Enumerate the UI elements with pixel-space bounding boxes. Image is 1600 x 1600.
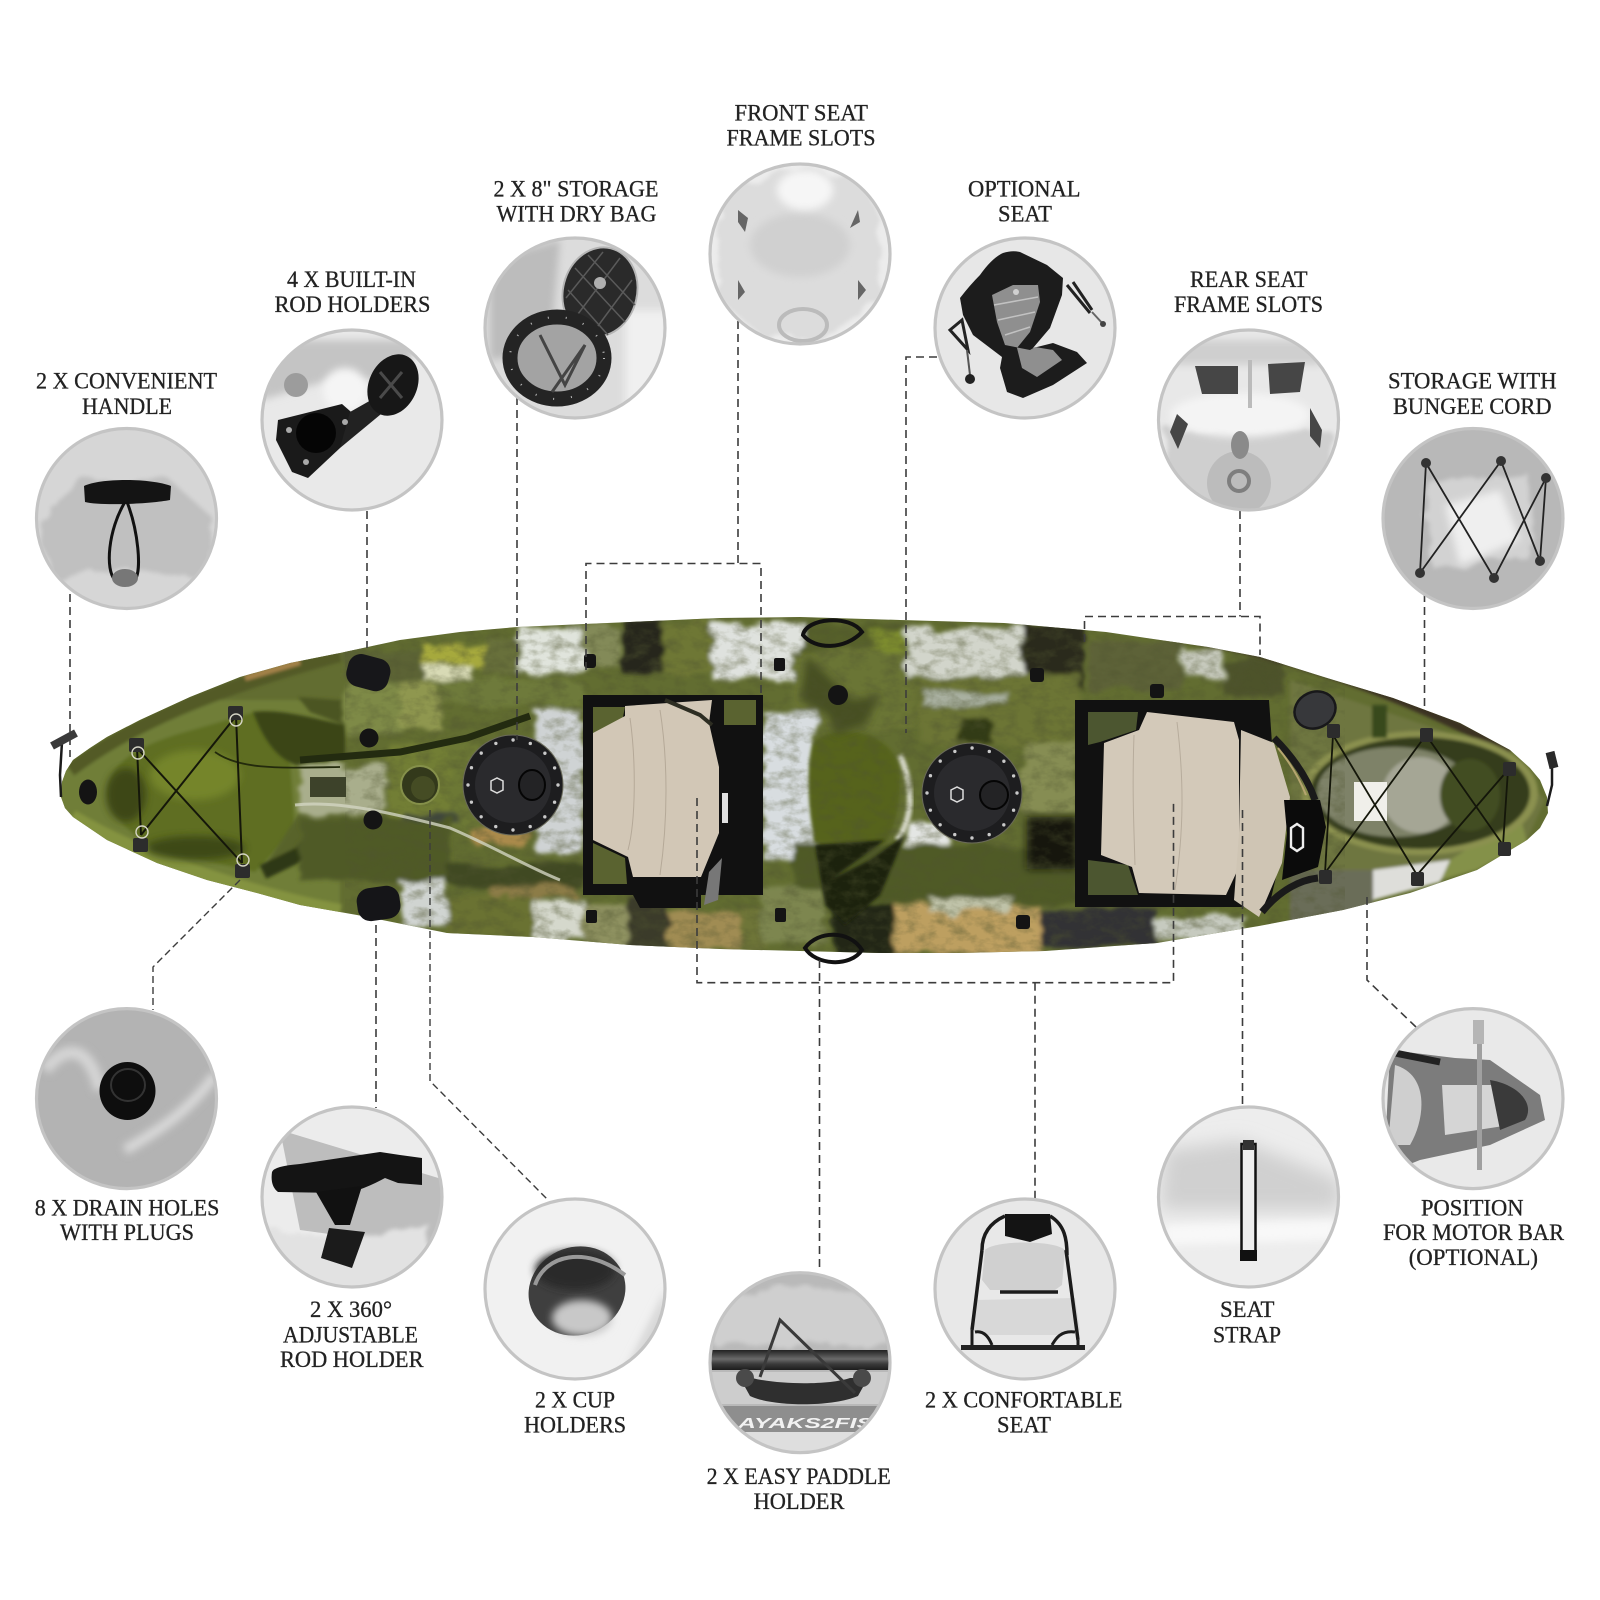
bow handles [52,733,1554,806]
leader: handle [69,594,71,757]
label: SEAT [997,1412,1051,1438]
icon: cup holder [486,1200,664,1378]
label: ADJUSTABLE [283,1322,418,1348]
label: OPTIONAL [968,176,1080,202]
callout: rear seat frame slots [1155,267,1345,515]
label: SEAT [1220,1297,1274,1323]
label [274,267,430,318]
callout: built-in rod holders [255,267,450,515]
front bungee cord [129,706,250,878]
label [36,369,217,420]
rear bungee cord [1319,724,1516,886]
hull body [61,617,1548,953]
label: 2 X 360° [310,1297,392,1323]
label [1388,369,1557,420]
leader: paddle holder [818,960,820,1272]
label: 2 X 8" STORAGE [494,176,658,202]
rod holders [343,651,1342,923]
icon: framed seat [936,1200,1114,1378]
leader: adjustable rod holder [375,925,377,1108]
label: 2 X CONFORTABLE [925,1388,1122,1414]
label: POSITION [1421,1196,1524,1222]
leader: bungee storage [1424,594,1426,707]
front seat frame [583,695,763,908]
label: FRONT SEAT [734,101,868,127]
label: HANDLE [82,394,172,420]
icon: front seat slots [712,166,888,342]
label: ROD HOLDER [280,1347,424,1373]
dark stain by rear seat [1027,817,1077,869]
label [707,1464,891,1515]
bow paint and footwell [61,652,342,912]
label: ROD HOLDERS [274,292,430,318]
callout: storage with bungee cord [1380,369,1570,615]
icon: paddle holder [712,1274,888,1451]
label: 4 X BUILT-IN [287,267,416,293]
leader: storage [516,397,518,740]
label [968,176,1080,227]
label: WITH PLUGS [60,1220,194,1246]
label [524,1388,626,1438]
icon: paddle holder: AYAKS2FIS [736,1415,873,1432]
icon: strap [1160,1108,1337,1286]
label [35,1196,219,1246]
center well [808,731,900,843]
drain plugs and fittings [79,654,1164,929]
icon: bungee storage [1384,430,1562,607]
center carry handles [803,620,862,962]
label: BUNGEE CORD [1393,394,1552,420]
channel lines [215,716,560,880]
leader: motor bar [1367,897,1416,1027]
leader: comfortable seat [697,798,1174,1199]
stern paint and recess [1186,644,1544,920]
callout: 360 adjustable rod holder [255,1100,450,1373]
label [726,101,876,152]
label: 2 X CONVENIENT [36,369,217,395]
leader: drain holes [153,880,240,1010]
callout: comfortable seat [925,1195,1122,1438]
seat logo [1291,824,1303,851]
rear hatch [922,743,1022,843]
rear seat frame [1075,700,1326,917]
icon: hatch with dry bag [486,240,664,416]
label: STRAP [1213,1322,1281,1348]
dashed leader lines [70,321,1424,1272]
label: HOLDERS [524,1412,626,1438]
painted deck patches [300,618,1285,955]
callout: motor bar [1380,1005,1570,1271]
front hatch [463,735,563,835]
callout: drain holes [30,1005,220,1246]
callout: seat strap [1155,1100,1345,1348]
bow recesses [253,697,350,872]
label: FRAME SLOTS [726,126,876,152]
label: 8 X DRAIN HOLES [35,1196,219,1222]
label: 2 X EASY PADDLE [707,1464,891,1490]
cup holder [401,766,439,804]
label: SEAT [998,201,1052,227]
callout: paddle holder [705,1270,895,1515]
label [925,1388,1122,1438]
label: HOLDER [754,1489,845,1515]
label [1383,1196,1564,1271]
sticker [1354,782,1387,821]
label: 2 X CUP [535,1388,615,1414]
callout: optional seat [930,176,1120,425]
leader: optional seat [906,357,937,733]
icon: kayak stern with motor bar [1384,1010,1562,1187]
label [280,1297,424,1373]
icon: drain plug [38,1010,215,1187]
icon: convenient handle [38,430,215,607]
label: (OPTIONAL) [1409,1245,1538,1271]
label: REAR SEAT [1190,267,1308,293]
label: FOR MOTOR BAR [1383,1220,1564,1246]
label: FRAME SLOTS [1174,292,1323,318]
leader: built-in rod holders [366,511,368,648]
callout: storage with dry bag [480,176,670,425]
icon: padded seat [936,240,1114,416]
callout: cup holders [480,1195,670,1438]
leader: rear seat frame slots [1084,511,1260,655]
label [494,176,658,227]
kayak top view [40,600,1570,970]
icon: rear seat slots [1160,332,1337,508]
label [1213,1297,1281,1348]
label [1174,267,1323,318]
leader: seat strap [1242,810,1244,1107]
icon: flush rod holder [264,332,440,508]
callout: front seat frame slots [705,101,895,350]
leader: cup holders [430,810,547,1199]
mottled paint texture [345,600,1345,970]
label: WITH DRY BAG [496,201,657,227]
leader: front seat frame slots [586,321,761,693]
label: STORAGE WITH [1388,369,1557,395]
callout: handle [30,369,220,622]
icon: adjustable rod holder [264,1108,440,1286]
